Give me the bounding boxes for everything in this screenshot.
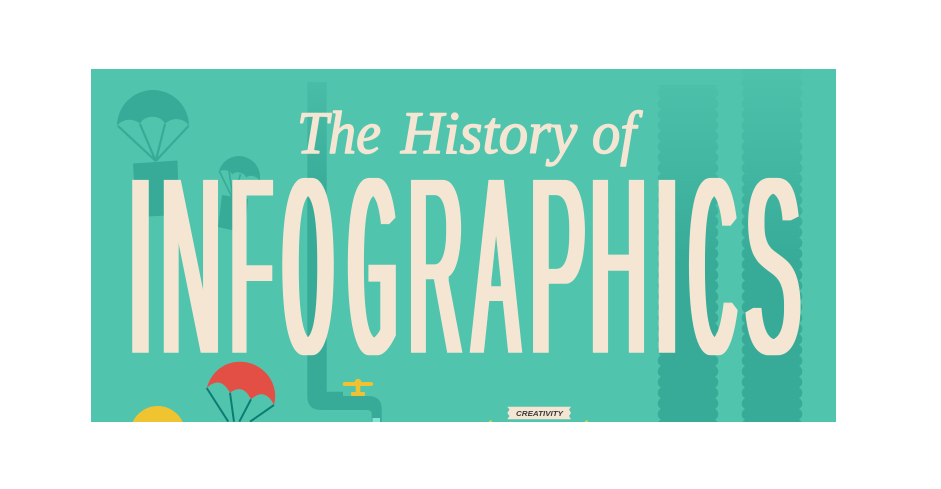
title: INFOGRAPHICS: R	[409, 124, 463, 410]
heading: The History of: The	[297, 100, 381, 166]
title: INFOGRAPHICS: G	[347, 133, 397, 436]
title: INFOGRAPHICS: C	[688, 133, 738, 436]
icon: yellow sun	[132, 406, 183, 422]
icon: red parachute	[207, 362, 275, 422]
label: creativity tag	[507, 407, 571, 419]
title: INFOGRAPHICS: N	[161, 123, 221, 410]
pipe	[307, 82, 382, 422]
title: INFOGRAPHICS: I	[128, 122, 153, 409]
infographic header	[91, 69, 836, 422]
title: INFOGRAPHICS: H	[590, 123, 646, 410]
title: INFOGRAPHICS	[132, 178, 801, 356]
title: INFOGRAPHICS: F	[231, 122, 272, 409]
title: INFOGRAPHICS: A	[473, 122, 519, 409]
heading: The History of: of	[592, 100, 643, 166]
icon: yellow tap	[343, 379, 373, 396]
title: INFOGRAPHICS: I	[654, 122, 680, 409]
heading: The History of	[300, 110, 644, 167]
label: creativity tag: CREATIVITY	[516, 409, 564, 418]
panel: teal background	[91, 69, 836, 461]
heading: The History of: History	[400, 100, 577, 166]
icon: large faded parachute	[117, 90, 189, 217]
title: INFOGRAPHICS: P	[530, 123, 585, 410]
title: INFOGRAPHICS: S	[746, 133, 801, 436]
water drip	[372, 418, 380, 422]
small bits at bottom edge	[489, 420, 588, 422]
title: INFOGRAPHICS: O	[282, 133, 334, 435]
icon: small faded parachute	[218, 156, 260, 230]
scalloped columns	[658, 121, 802, 422]
